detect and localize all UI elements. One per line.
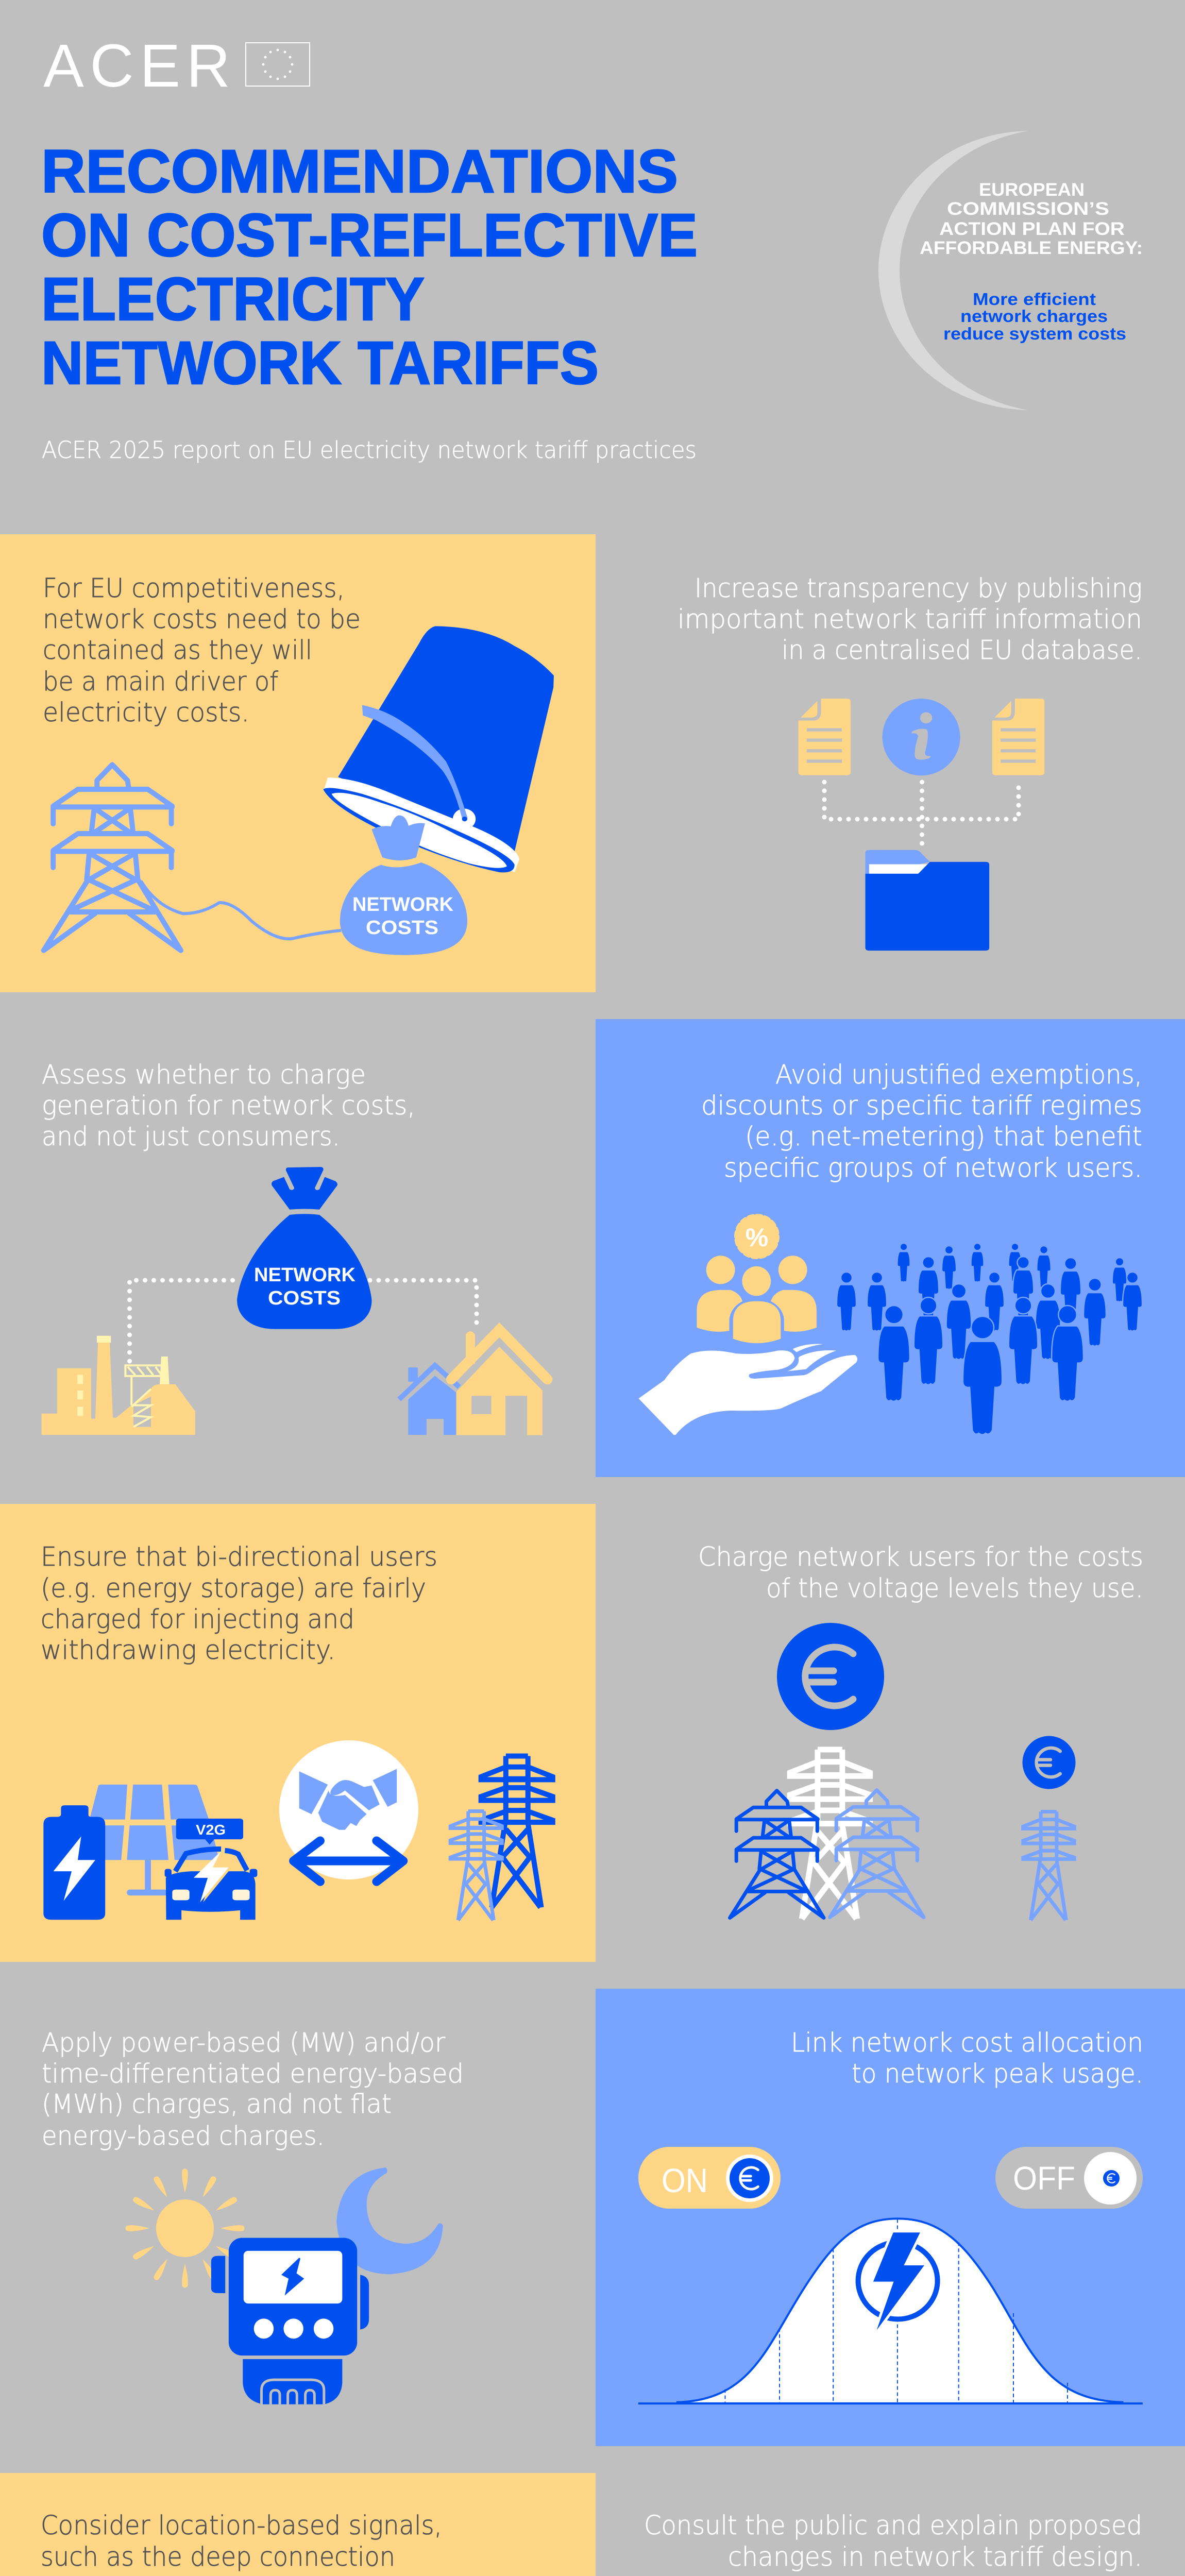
- icon: moon: [336, 2167, 443, 2274]
- title: ON COST-REFLECTIVE: [41, 201, 698, 269]
- icon: power plant: [42, 1336, 195, 1435]
- panel text: (MWh) charges, and not flat: [42, 2089, 392, 2120]
- icon: houses: [399, 1330, 547, 1435]
- icon: bucket: [323, 626, 554, 872]
- arrow: two-way: [294, 1841, 403, 1882]
- panel text: Avoid unjustified exemptions,: [775, 1060, 1142, 1090]
- panel text: Ensure that bi-directional users: [41, 1542, 437, 1572]
- panel: voltage levels: [698, 1542, 1143, 1920]
- panel text: Apply power-based (MW) and/or: [42, 2028, 445, 2058]
- icon: pylons: [450, 1756, 553, 1920]
- panel text: (e.g. net-metering) that benefit: [745, 1122, 1142, 1152]
- icon: network costs bag: COSTS: [366, 917, 438, 939]
- panel text: Consider location-based signals,: [41, 2511, 442, 2541]
- icon: documents and info: [799, 699, 1044, 775]
- panel: transparency: [678, 573, 1142, 951]
- callout: action plan: AFFORDABLE ENERGY:: [920, 238, 1143, 258]
- panel text: energy-based charges.: [42, 2121, 325, 2151]
- toggle: on: ON: [662, 2161, 708, 2199]
- icon: handshake: [279, 1740, 418, 1879]
- panel text: For EU competitiveness,: [43, 573, 345, 604]
- panel text: changes in network tariff design.: [728, 2542, 1142, 2572]
- title: RECOMMENDATIONS: [41, 138, 678, 206]
- callout: action plan: [878, 131, 1143, 410]
- panel text: [644, 2511, 1142, 2572]
- icon: crowd: [837, 1243, 1142, 1435]
- callout: action plan: network charges: [960, 307, 1108, 326]
- icon: network costs bag: [237, 1167, 371, 1329]
- panel text: important network tariff information: [678, 604, 1142, 635]
- toggle: off: OFF: [1013, 2160, 1075, 2197]
- panel text: (e.g. energy storage) are fairly: [41, 1573, 426, 1604]
- icon: wire: [141, 881, 341, 939]
- panel text: Increase transparency by publishing: [695, 573, 1142, 604]
- icon: discount badge: [737, 1216, 777, 1257]
- panel: peak usage: [596, 1989, 1185, 2446]
- icon: network costs bag: NETWORK: [254, 1264, 356, 1286]
- panel text: discounts or specific tariff regimes: [701, 1091, 1142, 1121]
- callout: action plan: COMMISSION’S: [947, 199, 1109, 219]
- panel text: and not just consumers.: [42, 1122, 340, 1152]
- panel: consultation: [644, 2511, 1142, 2576]
- icon: favoured group: [697, 1256, 817, 1343]
- icon: sun: [126, 2169, 244, 2287]
- panel text: Link network cost allocation: [791, 2028, 1143, 2058]
- panel text: charged for injecting and: [41, 1604, 354, 1635]
- panel text: electricity costs.: [43, 698, 249, 728]
- panel text: Consult the public and explain proposed: [644, 2511, 1142, 2541]
- title: NETWORK TARIFFS: [41, 329, 599, 397]
- icon: small euro coin: [1022, 1736, 1076, 1789]
- icon: smart meter: [211, 2238, 369, 2404]
- panel: charge generation: [42, 1060, 547, 1435]
- panel text: to network peak usage.: [852, 2059, 1143, 2089]
- icon: pylon: [44, 765, 181, 951]
- dotted connectors: [130, 1280, 477, 1361]
- icon: high voltage pylons: [730, 1750, 924, 1919]
- icon: network costs bag: NETWORK: [352, 894, 454, 916]
- panel text: network costs need to be: [43, 604, 361, 635]
- callout: action plan: EUROPEAN: [979, 180, 1085, 200]
- title: ELECTRICITY: [41, 265, 425, 333]
- panel text: [43, 573, 361, 728]
- ACER logo: ACER: [43, 32, 230, 100]
- toggle: off: [995, 2147, 1143, 2209]
- panel text: [698, 1542, 1143, 1604]
- panel text: contained as they will: [43, 635, 312, 666]
- panel text: [41, 1542, 437, 1666]
- panel: contain network costs: [0, 534, 596, 992]
- panel: location signals: [0, 2473, 596, 2576]
- icon: folder: [866, 850, 989, 951]
- icon: low voltage pylon: [1023, 1811, 1074, 1920]
- panel text: be a main driver of: [43, 667, 278, 697]
- panel text: [42, 1060, 415, 1152]
- icon: electric car: V2G: [196, 1822, 226, 1838]
- dotted connectors: [824, 782, 1019, 845]
- callout: action plan: reduce system costs: [943, 324, 1126, 343]
- icon: network costs bag: COSTS: [268, 1287, 341, 1309]
- panel text: [41, 2511, 442, 2576]
- subtitle: ACER 2025 report on EU electricity network tariff practices: [42, 436, 697, 464]
- chart: peak curve: [638, 2218, 1143, 2403]
- icon: battery: [43, 1805, 105, 1920]
- icon: solar panel: [78, 1785, 219, 1895]
- callout: action plan: More efficient: [973, 290, 1096, 309]
- icon: large euro coin: [777, 1623, 884, 1730]
- toggle: on: [638, 2147, 781, 2209]
- panel text: such as the deep connection: [41, 2542, 395, 2572]
- panel: exemptions: [596, 1019, 1185, 1477]
- panel text: specific groups of network users.: [724, 1153, 1142, 1183]
- icon: hand: [638, 1344, 857, 1435]
- panel text: of the voltage levels they use.: [766, 1573, 1143, 1604]
- panel text: Assess whether to charge: [42, 1060, 366, 1090]
- panel text: generation for network costs,: [42, 1091, 415, 1121]
- icon: network costs bag: [340, 816, 467, 955]
- panel: bi-directional users: [0, 1504, 596, 1962]
- panel: power-based charges: [42, 2028, 464, 2404]
- panel text: [791, 2028, 1143, 2089]
- panel text: [701, 1060, 1142, 1183]
- callout: action plan: ACTION PLAN FOR: [939, 219, 1125, 239]
- icon: electric car: [165, 1819, 257, 1920]
- title: [41, 138, 698, 397]
- panel text: time-differentiated energy-based: [42, 2059, 464, 2089]
- panel text: [678, 573, 1142, 666]
- panel text: withdrawing electricity.: [41, 1635, 335, 1666]
- panel text: [42, 2028, 464, 2151]
- panel text: in a centralised EU database.: [782, 635, 1142, 666]
- panel text: Charge network users for the costs: [698, 1542, 1143, 1572]
- icon: power bolt: [858, 2232, 938, 2330]
- icon: discount badge: %: [746, 1223, 768, 1252]
